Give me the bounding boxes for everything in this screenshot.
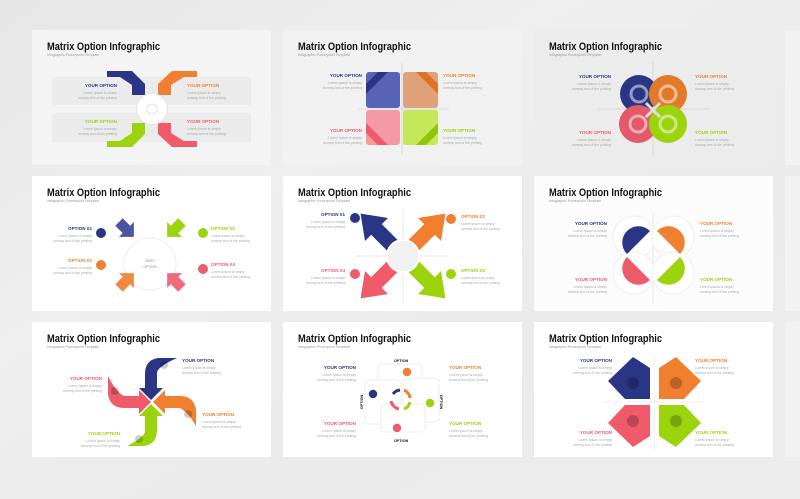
slide 7: pinwheel xyxy=(32,322,271,457)
slide 1: arrows with bars: YOUR OPTION xyxy=(85,83,118,88)
slide 4: small arrows best option xyxy=(32,176,271,311)
slide 4: small arrows best option: OPTION 03 xyxy=(68,258,92,263)
slide 2: squares: YOUR OPTION xyxy=(330,128,363,133)
slide 8: circle options: OPTION xyxy=(394,359,409,363)
slide 9: pentagons: YOUR OPTION xyxy=(580,430,613,435)
slide 3: rings: YOUR OPTION xyxy=(695,74,728,79)
slide 5: big arrows: OPTION 02 xyxy=(461,214,485,219)
slide 2: squares: YOUR OPTION xyxy=(443,128,476,133)
slide 6: petals xyxy=(534,176,773,311)
slide 1: arrows with bars: YOUR OPTION xyxy=(85,119,118,124)
slide 2: squares: YOUR OPTION xyxy=(443,73,476,78)
slide 4: small arrows best option: OPTION 02 xyxy=(211,226,235,231)
slide 8: circle options: YOUR OPTION xyxy=(449,365,482,370)
slide 5: big arrows: OPTION 01 xyxy=(321,212,345,217)
slide 3: rings: YOUR OPTION xyxy=(579,74,612,79)
arrows xyxy=(107,71,197,147)
slide 9: pentagons xyxy=(534,322,773,457)
slide 4: small arrows best option: OPTION 04 xyxy=(211,262,235,267)
slide 1: arrows with bars xyxy=(32,30,271,165)
slide 4: small arrows best option: OPTION xyxy=(143,265,157,269)
slide 4: small arrows best option: OPTION 01 xyxy=(68,226,92,231)
slide 1: arrows with bars: YOUR OPTION xyxy=(187,83,220,88)
slide 8: circle options: OPTION xyxy=(439,395,443,410)
slide 3: rings xyxy=(534,30,773,165)
slide 6: petals: YOUR OPTION xyxy=(575,277,608,282)
slide 3: rings: YOUR OPTION xyxy=(579,130,612,135)
slide 5: big arrows xyxy=(283,176,522,311)
slide 9: pentagons: YOUR OPTION xyxy=(580,358,613,363)
slide 7: pinwheel: YOUR OPTION xyxy=(182,358,215,363)
slide 8: circle options: OPTION xyxy=(360,394,364,409)
slide 2: squares: YOUR OPTION xyxy=(330,73,363,78)
slide 6: petals: YOUR OPTION xyxy=(700,277,733,282)
slide 6: petals: YOUR OPTION xyxy=(700,221,733,226)
partial slides right column xyxy=(785,30,800,457)
slide 3: rings: YOUR OPTION xyxy=(695,130,728,135)
slide 5: big arrows: OPTION 04 xyxy=(321,268,345,273)
slide 8: circle options: YOUR OPTION xyxy=(324,365,357,370)
slide 2: squares xyxy=(283,30,522,165)
slide 7: pinwheel: YOUR OPTION xyxy=(70,376,103,381)
slide 7: pinwheel: YOUR OPTION xyxy=(88,431,121,436)
slide 4: small arrows best option: BEST xyxy=(145,259,155,263)
slide 1: arrows with bars: YOUR OPTION xyxy=(187,119,220,124)
slide 8: circle options: YOUR OPTION xyxy=(324,421,357,426)
slide 6: petals: YOUR OPTION xyxy=(575,221,608,226)
slide 9: pentagons: YOUR OPTION xyxy=(695,430,728,435)
slide 8: circle options: YOUR OPTION xyxy=(449,421,482,426)
slide 8: circle options xyxy=(283,322,522,457)
slide 9: pentagons: YOUR OPTION xyxy=(695,358,728,363)
slide 7: pinwheel: YOUR OPTION xyxy=(202,412,235,417)
slide 8: circle options: OPTION xyxy=(394,439,409,443)
slide 5: big arrows: OPTION 03 xyxy=(461,268,485,273)
